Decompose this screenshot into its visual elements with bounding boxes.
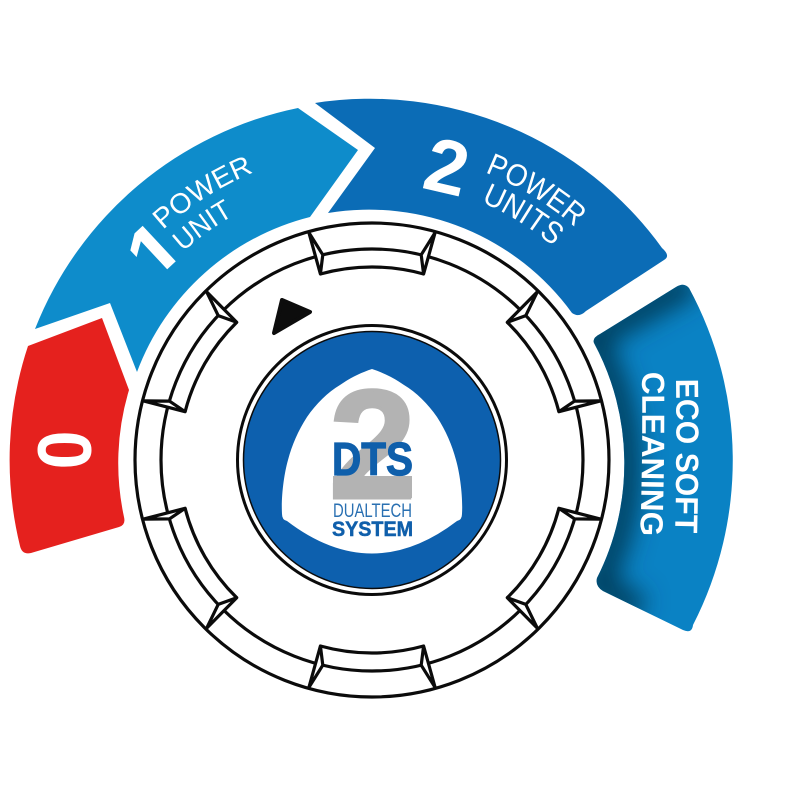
dial: outer toothed ring xyxy=(135,223,609,697)
panel: eco soft cleaning segment xyxy=(594,284,733,632)
label: ECO SOFT: ECO SOFT xyxy=(675,380,699,533)
DUALTECH wordmark: DUALTECH xyxy=(333,501,412,522)
panel: 2 power units segment xyxy=(315,98,668,316)
label: POWER: POWER xyxy=(487,154,585,226)
badge: DTS center disc xyxy=(238,326,506,594)
label: POWER: POWER xyxy=(152,158,252,228)
label: 0: 0 xyxy=(21,431,106,469)
DTS wordmark: DTS xyxy=(332,433,413,485)
grey 2 base bar xyxy=(333,476,412,498)
icon: black pointer triangle xyxy=(274,300,310,333)
SYSTEM wordmark: SYSTEM xyxy=(332,518,413,541)
label: UNITS: UNITS xyxy=(485,184,563,244)
label: CLEANING: CLEANING xyxy=(640,373,664,534)
label: UNIT: UNIT xyxy=(172,199,228,248)
number: 1: 1 xyxy=(108,202,207,304)
large grey 2: 2 xyxy=(329,358,416,531)
panel: 0 red segment xyxy=(10,318,129,553)
number: 2: 2 xyxy=(417,121,477,214)
white rounded triangle xyxy=(282,369,462,554)
panel: 1 power unit segment xyxy=(35,108,358,372)
